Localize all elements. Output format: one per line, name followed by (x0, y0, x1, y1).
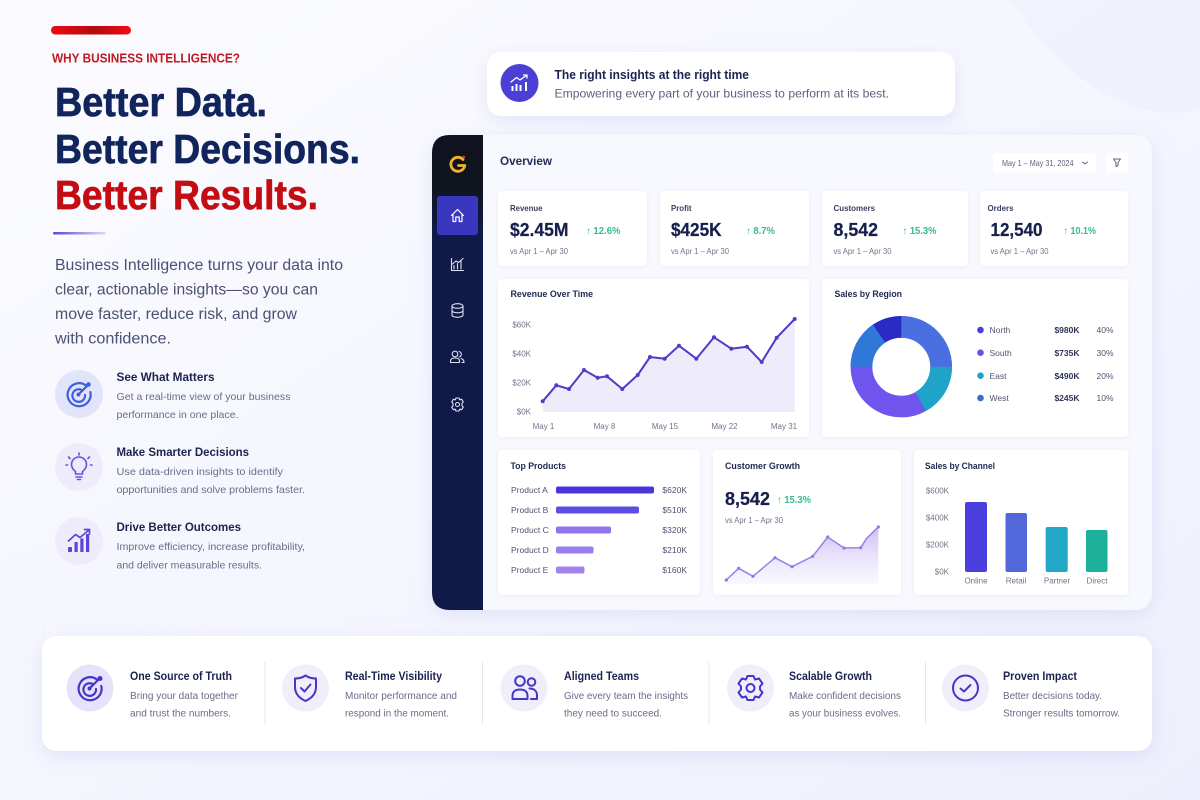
benefit: real-time visibility: respond in the moment. (345, 708, 449, 720)
chart: sales by channel: Retail (1006, 576, 1026, 586)
nav: analytics (452, 258, 464, 270)
chart: top products: Product D (511, 545, 549, 555)
KPI: profit: $425K (671, 220, 722, 240)
feature: make smarter decisions: Use data-driven insights to identify (116, 466, 284, 478)
benefit: one source of truth: One Source of Truth (130, 669, 232, 683)
intro paragraph: move faster, reduce risk, and grow (55, 306, 298, 323)
sidebar (432, 135, 483, 610)
donut chart (861, 327, 941, 407)
benefit: proven impact: Better decisions today. (1003, 690, 1102, 702)
chart: sales by channel: $0K (935, 568, 950, 576)
KPI: orders: 12,540 (990, 220, 1042, 240)
chart: sales by channel: $400K (926, 514, 950, 522)
benefit: aligned teams (500, 664, 688, 720)
chart: top products: Product C (511, 525, 549, 535)
chart: revenue over time: May 15 (652, 422, 679, 431)
chart: top products: $510K (662, 505, 687, 515)
legend: $980K (1054, 325, 1080, 335)
chart: revenue over time: May 1 (533, 422, 555, 431)
intro paragraph: clear, actionable insights—so you can (55, 282, 318, 298)
chart: revenue over time: $0K (517, 408, 532, 416)
chart: revenue over time: May 31 (771, 422, 798, 431)
overview heading: Overview (500, 154, 553, 168)
intro paragraph (54, 257, 343, 348)
chart: sales by channel: Online (964, 576, 988, 586)
benefit: one source of truth (66, 664, 238, 720)
nav: settings (452, 398, 463, 411)
chart: customer growth: 8,542 (725, 489, 770, 509)
benefit: proven impact (942, 664, 1120, 720)
benefit: aligned teams: Give every team the insights (564, 690, 688, 702)
chart: revenue over time: $20K (512, 378, 532, 388)
benefit: scalable growth: as your business evolves. (789, 708, 901, 720)
chart: sales by channel: Partner (1044, 576, 1070, 586)
KPI: orders: ↑ 10.1% (1064, 226, 1096, 237)
feature: see what matters: Get a real-time view of your business (116, 391, 290, 403)
intro paragraph: with confidence. (54, 330, 171, 348)
eyebrow: WHY BUSINESS INTELLIGENCE? (52, 52, 240, 66)
benefit: real-time visibility: Monitor performance and (345, 690, 457, 702)
chart: top products: $160K (662, 565, 687, 575)
legend: South (990, 348, 1012, 358)
chart: sales by channel: Direct (1087, 576, 1108, 586)
chart: top products (498, 450, 700, 595)
background (2, 536, 206, 800)
feature: drive better outcomes: Drive Better Outcomes (116, 520, 241, 534)
KPI: revenue: ↑ 12.6% (586, 226, 621, 237)
chart: revenue over time (498, 279, 809, 437)
chart: sales by region: Sales by Region (834, 289, 902, 300)
intro paragraph: Business Intelligence turns your data into (55, 257, 343, 274)
legend: $735K (1054, 348, 1080, 358)
chart: customer growth: Customer Growth (725, 461, 800, 472)
chart: sales by channel: $600K (926, 486, 950, 496)
benefit: scalable growth (727, 664, 901, 720)
chart: sales by channel: $200K (926, 540, 950, 550)
chart: customer growth (713, 450, 901, 595)
KPI: orders (980, 191, 1128, 266)
legend: 40% (1096, 325, 1114, 335)
KPI: profit: ↑ 8.7% (746, 226, 775, 237)
nav: home active (437, 196, 478, 235)
icon: insights chart (500, 64, 538, 102)
KPI: revenue: $2.45M (510, 220, 568, 240)
feature: drive better outcomes (55, 517, 305, 572)
chart: customer growth: ↑ 15.3% (777, 495, 811, 506)
headline rule (53, 232, 106, 234)
legend: 20% (1096, 371, 1114, 381)
benefit: proven impact: Proven Impact (1003, 669, 1077, 683)
feature: make smarter decisions: Make Smarter Decisions (116, 445, 249, 459)
chart: revenue over time: May 22 (711, 422, 738, 431)
benefit: scalable growth: Make confident decisions (789, 690, 901, 702)
KPI: customers: ↑ 15.3% (902, 226, 937, 237)
benefit: real-time visibility: Real-Time Visibility (345, 669, 442, 683)
KPI: orders: vs Apr 1 – Apr 30 (990, 247, 1049, 256)
date selector (993, 153, 1096, 172)
chart: sales by region (822, 279, 1128, 437)
benefit: aligned teams: Aligned Teams (564, 669, 639, 683)
chart: sales by channel: Sales by Channel (925, 461, 995, 472)
chart: revenue over time: May 8 (594, 422, 616, 431)
chart: top products: Product B (511, 505, 549, 515)
benefit: one source of truth: Bring your data together (130, 690, 238, 702)
filter button (1106, 153, 1128, 172)
chart: top products: Product E (511, 565, 549, 575)
chart: revenue over time: $60K (512, 320, 532, 330)
headline: Better Data. (55, 79, 267, 125)
feature: drive better outcomes: Improve efficiency, increase profitability, (116, 541, 305, 553)
benefit: proven impact: Stronger results tomorrow. (1003, 708, 1120, 720)
legend: $245K (1054, 393, 1080, 403)
nav: database (452, 304, 463, 317)
feature: make smarter decisions: opportunities and solve problems faster. (116, 484, 305, 496)
legend: North (990, 325, 1011, 335)
chart: revenue over time: Revenue Over Time (510, 289, 593, 300)
dashboard panel (432, 135, 1152, 610)
headline: Better Decisions. (55, 126, 360, 172)
callout: right insights: The right insights at the right time (554, 68, 749, 82)
benefit: one source of truth: and trust the numbers. (130, 708, 231, 720)
legend: East (990, 371, 1007, 381)
chart: top products: Top Products (510, 461, 566, 472)
KPI: revenue: vs Apr 1 – Apr 30 (510, 247, 569, 256)
callout: right insights: Empowering every part of your business to perform at its best. (554, 86, 889, 100)
chart: customer growth: vs Apr 1 – Apr 30 (725, 516, 784, 525)
KPI: customers: vs Apr 1 – Apr 30 (834, 247, 892, 256)
KPI: profit: Profit (671, 203, 692, 213)
KPI: customers: 8,542 (834, 220, 878, 240)
chart: top products: $210K (662, 545, 687, 555)
chart: top products: Product A (511, 485, 548, 495)
nav: users (450, 351, 464, 362)
legend: 10% (1096, 393, 1114, 403)
feature: see what matters (55, 370, 290, 421)
feature: see what matters: performance in one place. (116, 409, 238, 421)
date selector: May 1 – May 31, 2024 (1002, 159, 1074, 168)
KPI: revenue: Revenue (510, 203, 543, 213)
KPI: profit (660, 191, 809, 266)
headline (55, 79, 360, 218)
benefit: real-time visibility (282, 664, 457, 720)
KPI: orders: Orders (988, 203, 1014, 213)
chart: top products: $320K (662, 525, 687, 535)
left intro column (51, 26, 360, 572)
KPI: customers (822, 191, 968, 266)
legend: $490K (1054, 371, 1080, 381)
legend: West (990, 393, 1009, 403)
bottom benefits strip (42, 636, 1152, 751)
legend (977, 325, 1114, 403)
headline: Better Results. (55, 172, 318, 218)
benefit: scalable growth: Scalable Growth (789, 669, 872, 683)
feature: drive better outcomes: and deliver measurable results. (116, 560, 262, 572)
KPI: customers: Customers (834, 203, 875, 213)
accent bar (51, 26, 131, 34)
logo (451, 156, 465, 171)
feature: see what matters: See What Matters (116, 370, 215, 384)
benefit: aligned teams: they need to succeed. (564, 708, 662, 720)
chart: sales by channel (914, 450, 1128, 595)
chart: revenue over time: $40K (512, 350, 532, 358)
chart: top products: $620K (662, 485, 687, 495)
KPI: revenue (498, 191, 647, 266)
KPI: profit: vs Apr 1 – Apr 30 (671, 247, 730, 256)
legend: 30% (1096, 348, 1114, 358)
feature: make smarter decisions (55, 443, 305, 496)
callout: right insights (487, 52, 955, 116)
